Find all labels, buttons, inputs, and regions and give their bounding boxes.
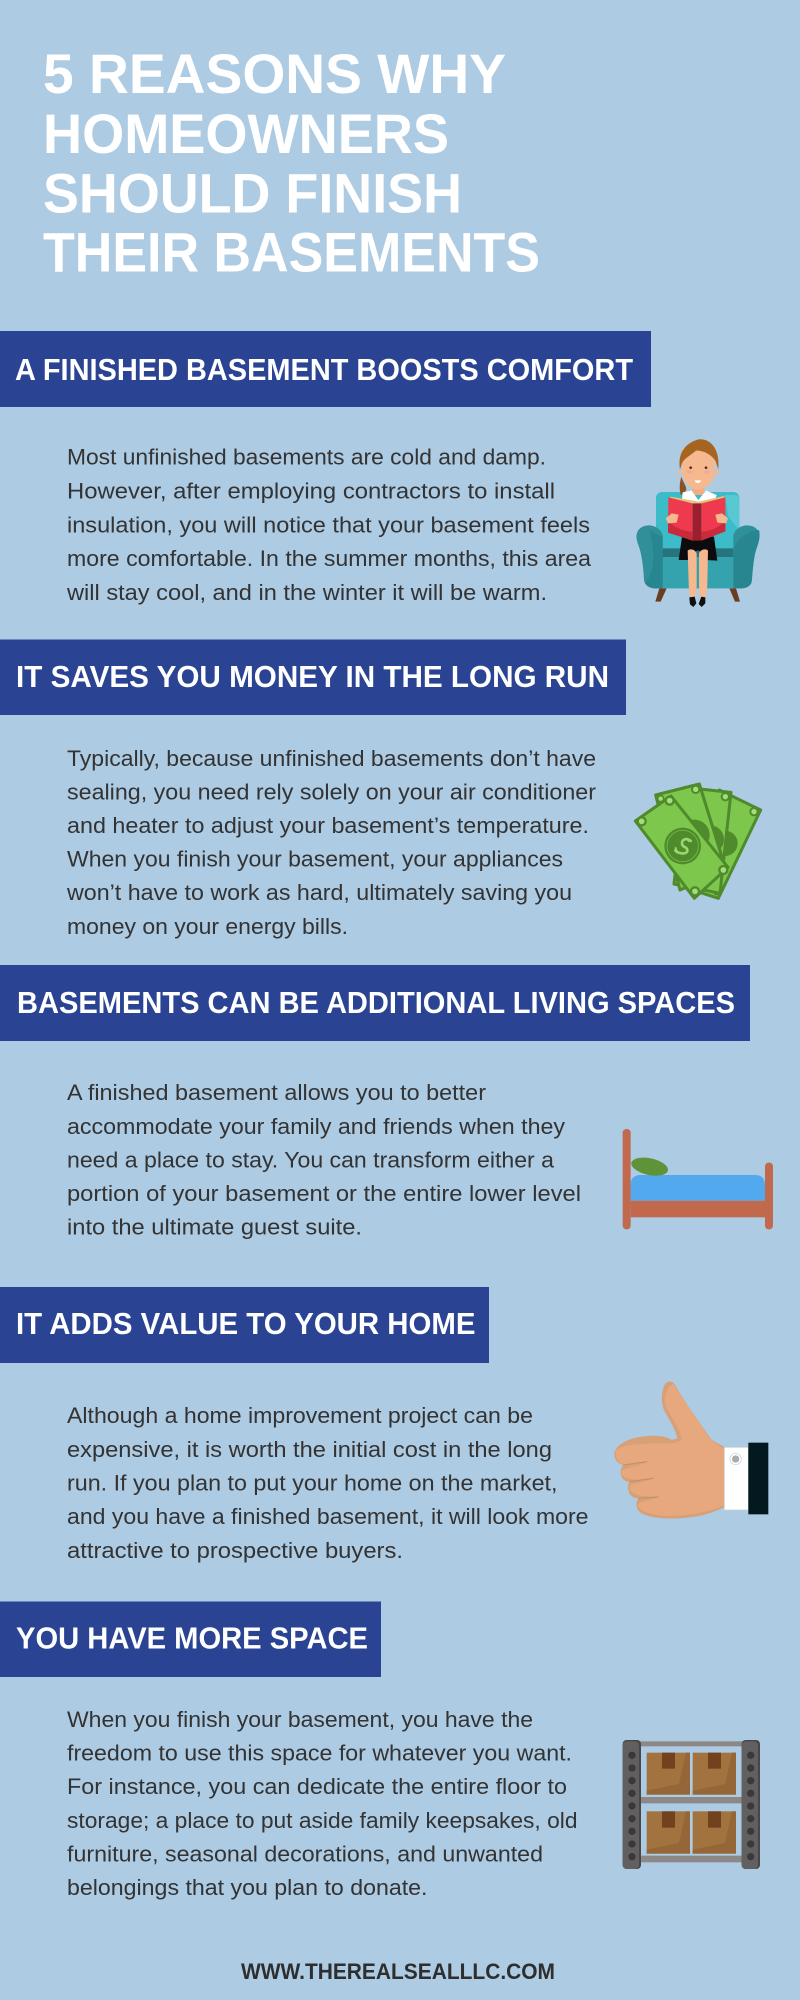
body text 5: freedom to use this space for whatever you want. xyxy=(67,1740,572,1766)
body text 2: money on your energy bills. xyxy=(67,914,348,939)
body text 1: more comfortable. In the summer months, this area xyxy=(67,546,592,571)
heading bar 2: IT SAVES YOU MONEY IN THE LONG RUN xyxy=(16,659,609,694)
body text 1: However, after employing contractors to install xyxy=(67,478,555,504)
title: THEIR BASEMENTS xyxy=(43,220,540,284)
body text 4: run. If you plan to put your home on the market, xyxy=(67,1470,558,1496)
footer website url: WWW.THEREALSEALLLC.COM xyxy=(241,1959,555,1984)
body text 4: Although a home improvement project can be xyxy=(67,1403,533,1428)
body text 1: Most unfinished basements are cold and damp. xyxy=(67,444,546,470)
heading bar 3: BASEMENTS CAN BE ADDITIONAL LIVING SPACES xyxy=(17,985,735,1020)
heading bar 4: IT ADDS VALUE TO YOUR HOME xyxy=(16,1306,476,1341)
body text 5: For instance, you can dedicate the entire floor to xyxy=(67,1774,567,1799)
body text 2: Typically, because unfinished basements don’t have xyxy=(67,746,596,771)
body text 1: insulation, you will notice that your basement feels xyxy=(67,512,590,538)
panel: additional living spaces xyxy=(0,965,773,1240)
body text 5: storage; a place to put aside family keepsakes, old xyxy=(67,1808,578,1833)
body text 2: sealing, you need rely solely on your air conditioner xyxy=(67,780,596,804)
body text 3: A finished basement allows you to better xyxy=(67,1080,486,1105)
panel: a finished basement boosts comfort xyxy=(0,331,760,607)
body text 5: furniture, seasonal decorations, and unwanted xyxy=(67,1842,543,1866)
title: 5 REASONS WHY xyxy=(43,42,506,105)
body text 1: will stay cool, and in the winter it will be warm. xyxy=(66,580,547,605)
heading bar 4 xyxy=(0,1287,489,1363)
heading bar 1: A FINISHED BASEMENT BOOSTS COMFORT xyxy=(15,352,633,387)
body text 4 xyxy=(67,1403,588,1563)
body text 2: When you finish your basement, your appliances xyxy=(67,846,563,872)
panel: it saves you money xyxy=(0,640,761,939)
body text 2: and heater to adjust your basement’s temperature. xyxy=(67,813,589,838)
heading bar 2 xyxy=(0,640,626,715)
title: SHOULD FINISH xyxy=(43,162,462,224)
panel: you have more space xyxy=(0,1602,760,1900)
body text 3: portion of your basement or the entire lower level xyxy=(67,1181,581,1206)
body text 3: need a place to stay. You can transform either a xyxy=(67,1148,555,1172)
heading bar 5: YOU HAVE MORE SPACE xyxy=(16,1620,368,1656)
title xyxy=(43,42,540,284)
heading bar 5 xyxy=(0,1602,381,1677)
panel: adds value xyxy=(0,1287,768,1563)
icon: storage shelf with boxes xyxy=(623,1740,760,1869)
body text 3: accommodate your family and friends when they xyxy=(67,1114,565,1139)
body text 4: attractive to prospective buyers. xyxy=(67,1538,403,1563)
icon: thumbs up with cuff xyxy=(614,1381,768,1519)
body text 1 xyxy=(66,444,592,605)
body text 4: expensive, it is worth the initial cost in the long xyxy=(67,1437,552,1462)
body text 2: won’t have to work as hard, ultimately saving you xyxy=(66,880,572,905)
body text 2 xyxy=(66,746,596,939)
heading bar 1 xyxy=(0,331,651,407)
body text 3: into the ultimate guest suite. xyxy=(67,1214,362,1240)
icon: woman reading in armchair xyxy=(636,439,760,607)
body text 5 xyxy=(67,1707,578,1900)
icon: bed xyxy=(623,1129,773,1229)
title: HOMEOWNERS xyxy=(43,102,449,165)
body text 3 xyxy=(67,1080,581,1240)
body text 5: belongings that you plan to donate. xyxy=(67,1875,428,1900)
icon: fan of dollar bills xyxy=(635,784,761,898)
body text 5: When you finish your basement, you have the xyxy=(67,1707,533,1732)
heading bar 3 xyxy=(0,965,750,1041)
body text 4: and you have a finished basement, it will look more xyxy=(67,1504,588,1529)
